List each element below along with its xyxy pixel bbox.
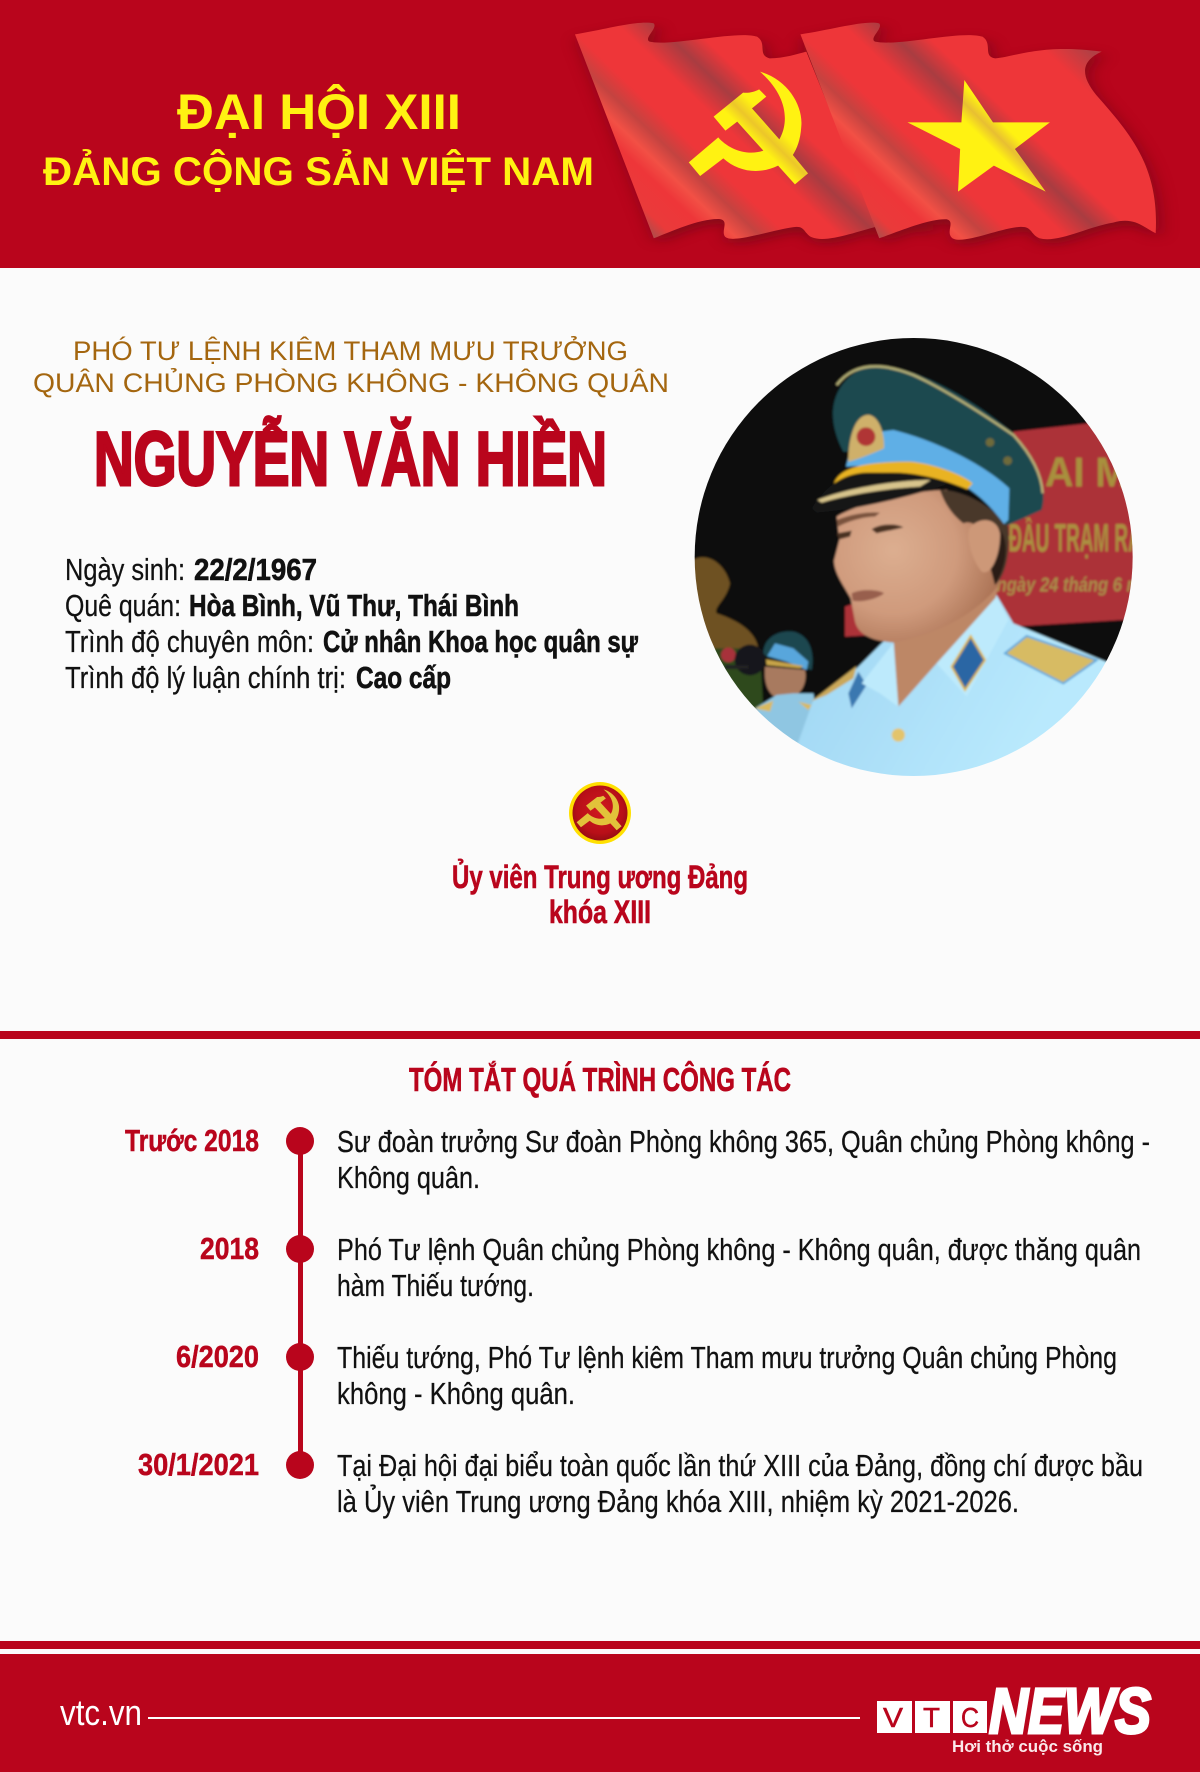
personal details [65, 552, 638, 695]
timeline entry: 2018: 2018 [200, 1231, 259, 1266]
portrait photo: ngày 24 tháng 6 n [997, 574, 1137, 597]
timeline entry: before 2018: Trước 2018 [125, 1123, 259, 1158]
position title: QUÂN CHỦNG PHÒNG KHÔNG - KHÔNG QUÂN [33, 366, 669, 398]
VTC News logo: T [923, 1702, 940, 1733]
career timeline [125, 1123, 1150, 1519]
VTC News logo: Hơi thở cuộc sống [952, 1737, 1103, 1756]
position title [33, 334, 669, 398]
website label: vtc.vn [60, 1692, 142, 1733]
personal details: Quê quán: [65, 588, 181, 623]
position title: PHÓ TƯ LỆNH KIÊM THAM MƯU TRƯỞNG [73, 334, 628, 366]
VTC News logo: V [883, 1702, 903, 1733]
icon: hammer and sickle [689, 72, 808, 184]
timeline entry: 2018 [200, 1231, 1141, 1303]
personal details: Trình độ chuyên môn: [65, 624, 314, 659]
timeline entry: 30/1/2021: là Ủy viên Trung ương Đảng khóa XIII, nhiệm kỳ 2021-2026. [337, 1483, 1019, 1519]
icon: waving party and national flags [575, 23, 1159, 244]
icon: yellow star [907, 80, 1050, 192]
timeline entry: 2018: hàm Thiếu tướng. [337, 1268, 534, 1303]
party role caption [452, 859, 748, 930]
timeline entry: before 2018 [125, 1123, 1150, 1195]
portrait photo [694, 338, 1133, 776]
VTC News logo: NEWS [989, 1675, 1151, 1747]
personal details: Trình độ lý luận chính trị: [65, 660, 346, 695]
VTC News logo: C [961, 1702, 979, 1733]
subtitle: Đảng Cộng sản Việt Nam: ĐẢNG CỘNG SẢN VIỆT NAM [43, 148, 594, 194]
party role caption: Ủy viên Trung ương Đảng [452, 859, 748, 895]
name heading: NGUYỄN VĂN HIỀN [94, 416, 607, 502]
personal details: Cử nhân Khoa học quân sự [323, 624, 638, 659]
personal details: Cao cấp [356, 660, 451, 695]
right flag [800, 23, 1156, 240]
personal details: 22/2/1967 [194, 552, 317, 587]
timeline entry: 6/2020 [176, 1339, 1117, 1411]
title: Đại hội XIII: ĐẠI HỘI XIII [177, 83, 461, 140]
personal details: Ngày sinh: [65, 552, 185, 587]
timeline entry: 30/1/2021 [138, 1447, 1143, 1519]
personal details: Hòa Bình, Vũ Thư, Thái Bình [189, 588, 519, 623]
section heading: career summary: TÓM TẮT QUÁ TRÌNH CÔNG TÁC [409, 1060, 791, 1098]
icon: party badge [569, 782, 631, 844]
portrait photo: AI M [1045, 449, 1128, 496]
header banner [0, 0, 1200, 268]
timeline entry: 30/1/2021: 30/1/2021 [138, 1447, 259, 1482]
timeline entry: 6/2020: 6/2020 [176, 1339, 259, 1374]
timeline entry: before 2018: Không quân. [337, 1160, 480, 1195]
party role caption: khóa XIII [549, 894, 651, 930]
left flag [575, 23, 877, 239]
footer [0, 1654, 1200, 1772]
timeline axis [286, 1127, 314, 1479]
timeline entry: 6/2020: không - Không quân. [337, 1376, 575, 1411]
VTC News logo [877, 1675, 1151, 1756]
